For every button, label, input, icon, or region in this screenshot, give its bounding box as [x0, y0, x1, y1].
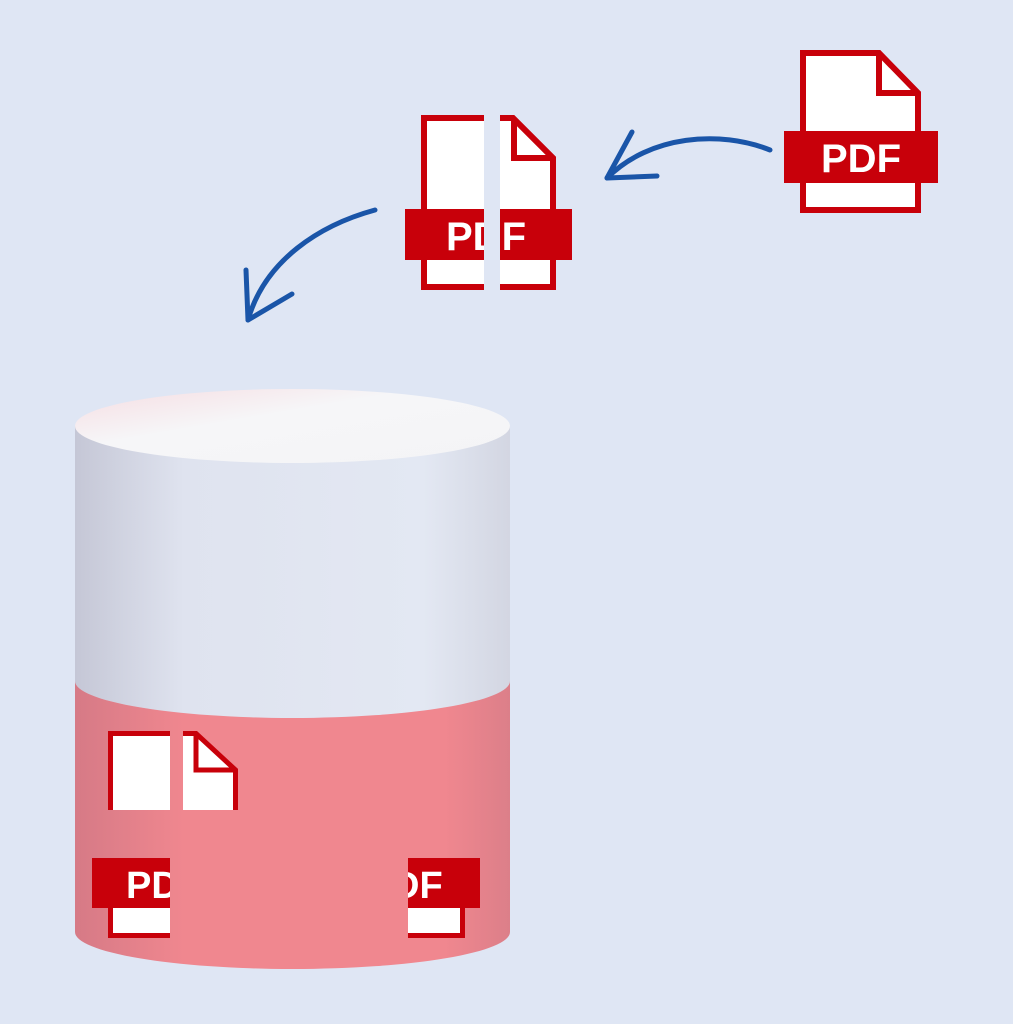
icon: split pdf file	[405, 115, 572, 290]
database cylinder	[75, 389, 510, 969]
stored file fragment: left pdf label: PD	[126, 865, 179, 907]
stored file fragment: right pdf label: DF	[392, 865, 443, 907]
arrow: from split pdf to database	[246, 210, 375, 320]
icon: full pdf file: PDF	[821, 137, 901, 181]
stored file fragment: top left page	[108, 731, 170, 810]
arrow: from full pdf to split pdf	[607, 132, 770, 178]
icon: split pdf file: PDF	[446, 215, 526, 259]
icon: full pdf file	[784, 53, 938, 210]
stored file fragment: left pdf label	[92, 858, 179, 938]
stored file fragment: top right page with fold	[183, 731, 238, 810]
stored file fragment: right pdf label	[392, 858, 480, 938]
icon: split pdf file: PDF	[446, 215, 526, 259]
